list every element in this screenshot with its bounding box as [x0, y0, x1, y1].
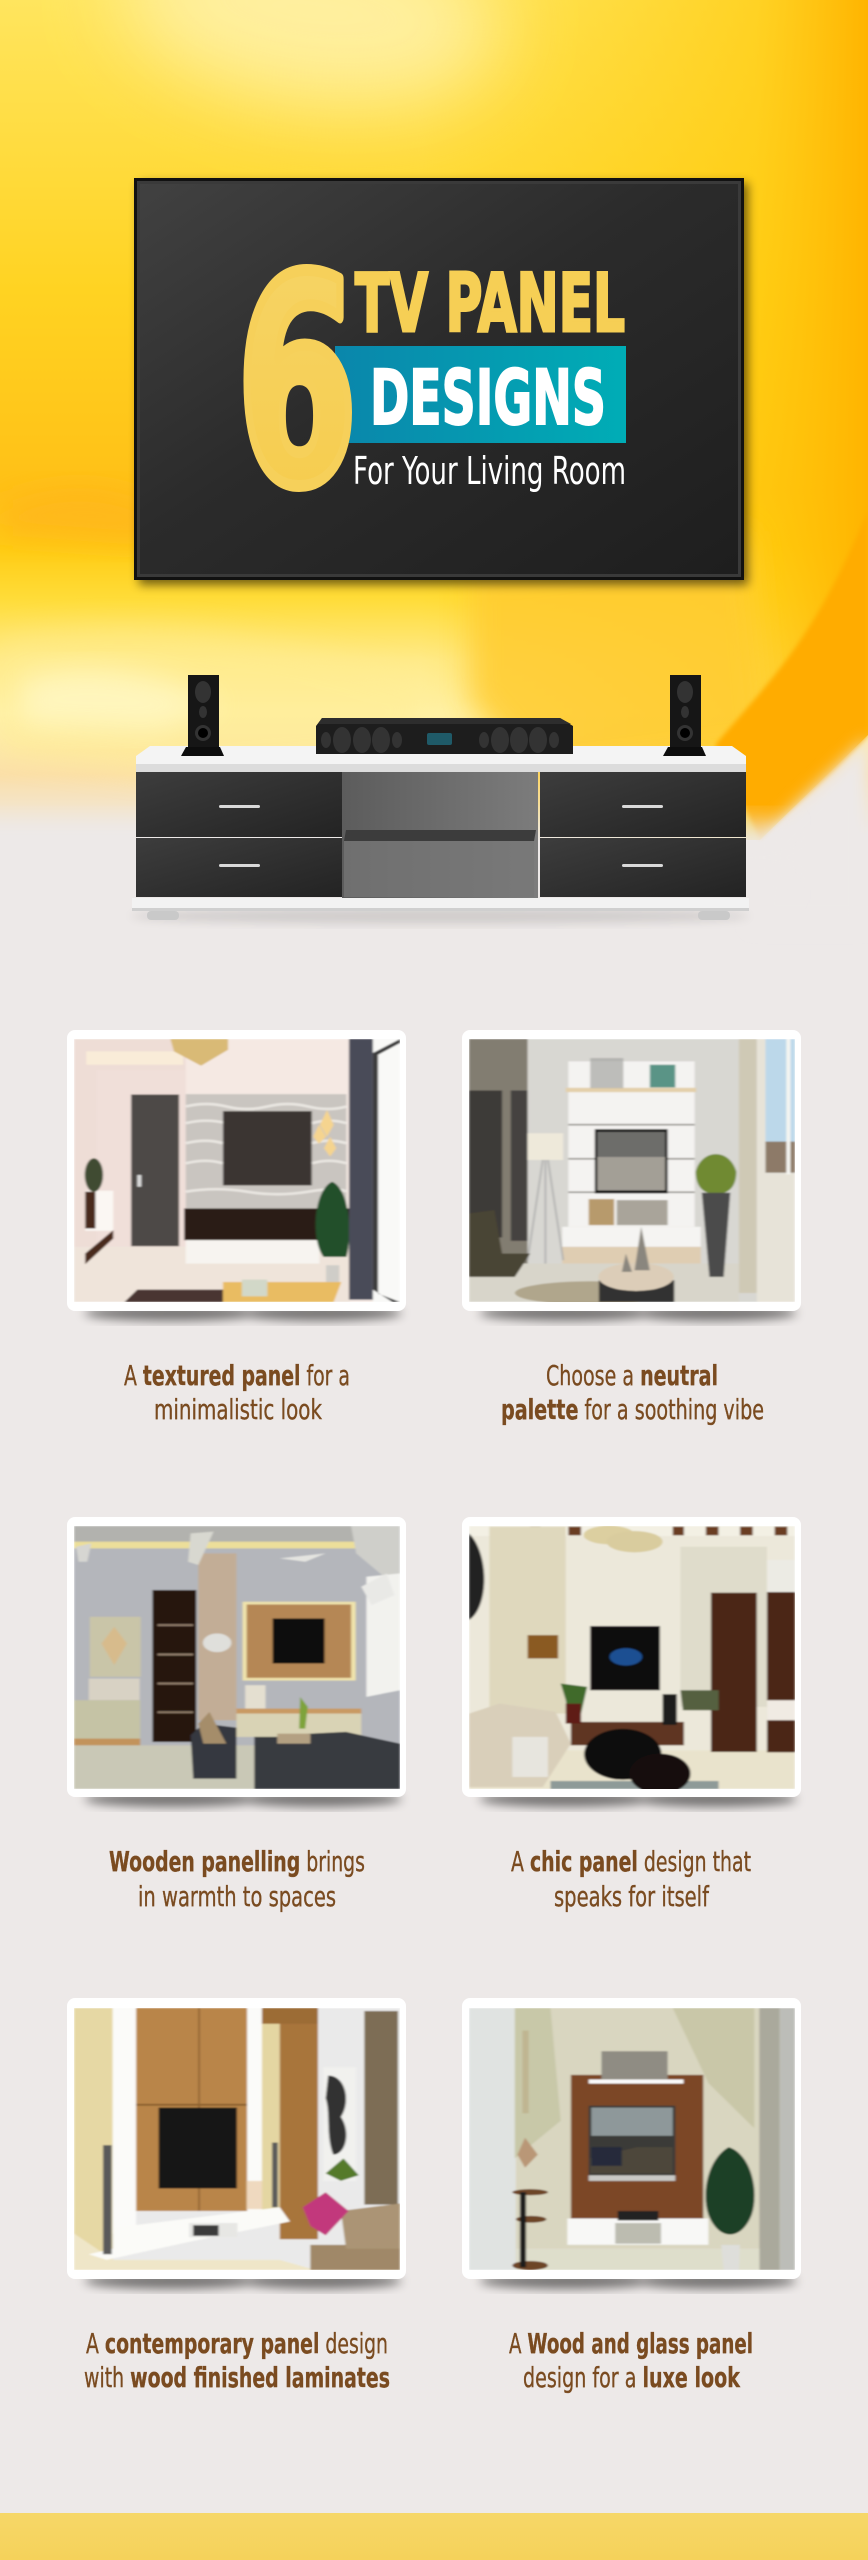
right speaker: [663, 675, 706, 756]
caption: A Wood and glass panel: [509, 2327, 753, 2360]
heading: TV PANEL: TV PANEL: [355, 257, 625, 350]
drawers right: [540, 772, 746, 837]
left speaker: [181, 675, 224, 756]
heading: DESIGNS: DESIGNS: [370, 353, 606, 442]
room photo: [469, 1039, 795, 1302]
card 5: contemporary panel: with wood finished laminates: [84, 2361, 390, 2394]
card 2: neutral palette: [462, 1030, 801, 1426]
open shelf: [342, 772, 538, 898]
title block: [236, 216, 626, 550]
card 5: contemporary panel: [67, 1998, 406, 2394]
card 2: neutral palette: palette for a soothing vibe: [501, 1393, 764, 1426]
caption: A contemporary panel design: [86, 2327, 388, 2360]
caption: Choose a neutral: [546, 1359, 718, 1392]
card shadow: [479, 1791, 797, 1807]
caption: A textured panel for a: [124, 1359, 350, 1392]
big number 6: 6: [236, 216, 358, 550]
room photo: [74, 1039, 400, 1302]
handles: [219, 805, 260, 808]
footer bar: [0, 2513, 868, 2560]
bottom slab and feet: [132, 898, 749, 911]
subheading: For Your Living Room: [353, 449, 626, 493]
card frame: [67, 1998, 406, 2279]
room photo: [74, 1526, 400, 1789]
TV screen: [134, 178, 748, 585]
card 1: textured panel: minimalistic look: [154, 1393, 323, 1426]
card frame: [462, 1030, 801, 1311]
card frame: [67, 1030, 406, 1311]
drawers left: [136, 772, 342, 837]
card frame: [462, 1998, 801, 2279]
TV unit furniture: [130, 675, 750, 924]
card 3: wooden panelling: in warmth to spaces: [138, 1880, 336, 1913]
card 4: chic panel: speaks for itself: [554, 1880, 710, 1913]
caption: A chic panel design that: [511, 1845, 751, 1878]
card shadow: [84, 2273, 402, 2289]
card shadow: [84, 1305, 402, 1321]
room photo: [469, 2008, 795, 2270]
card 6: wood and glass panel: design for a luxe look: [523, 2361, 741, 2394]
top slab: [136, 746, 746, 772]
caption: Wooden panelling brings: [109, 1845, 365, 1878]
soundbar: [316, 718, 573, 754]
room photo: [469, 1526, 795, 1789]
card frame: [67, 1517, 406, 1797]
card 3: wooden panelling: [67, 1517, 406, 1913]
card shadow: [479, 2273, 797, 2289]
room photo: [74, 2008, 400, 2270]
card shadow: [84, 1791, 402, 1807]
card shadow: [479, 1305, 797, 1321]
teal banner: [335, 346, 626, 443]
card 6: wood and glass panel: [462, 1998, 801, 2394]
card 4: chic panel: [462, 1517, 801, 1913]
card 1: textured panel: [67, 1030, 406, 1426]
card frame: [462, 1517, 801, 1797]
